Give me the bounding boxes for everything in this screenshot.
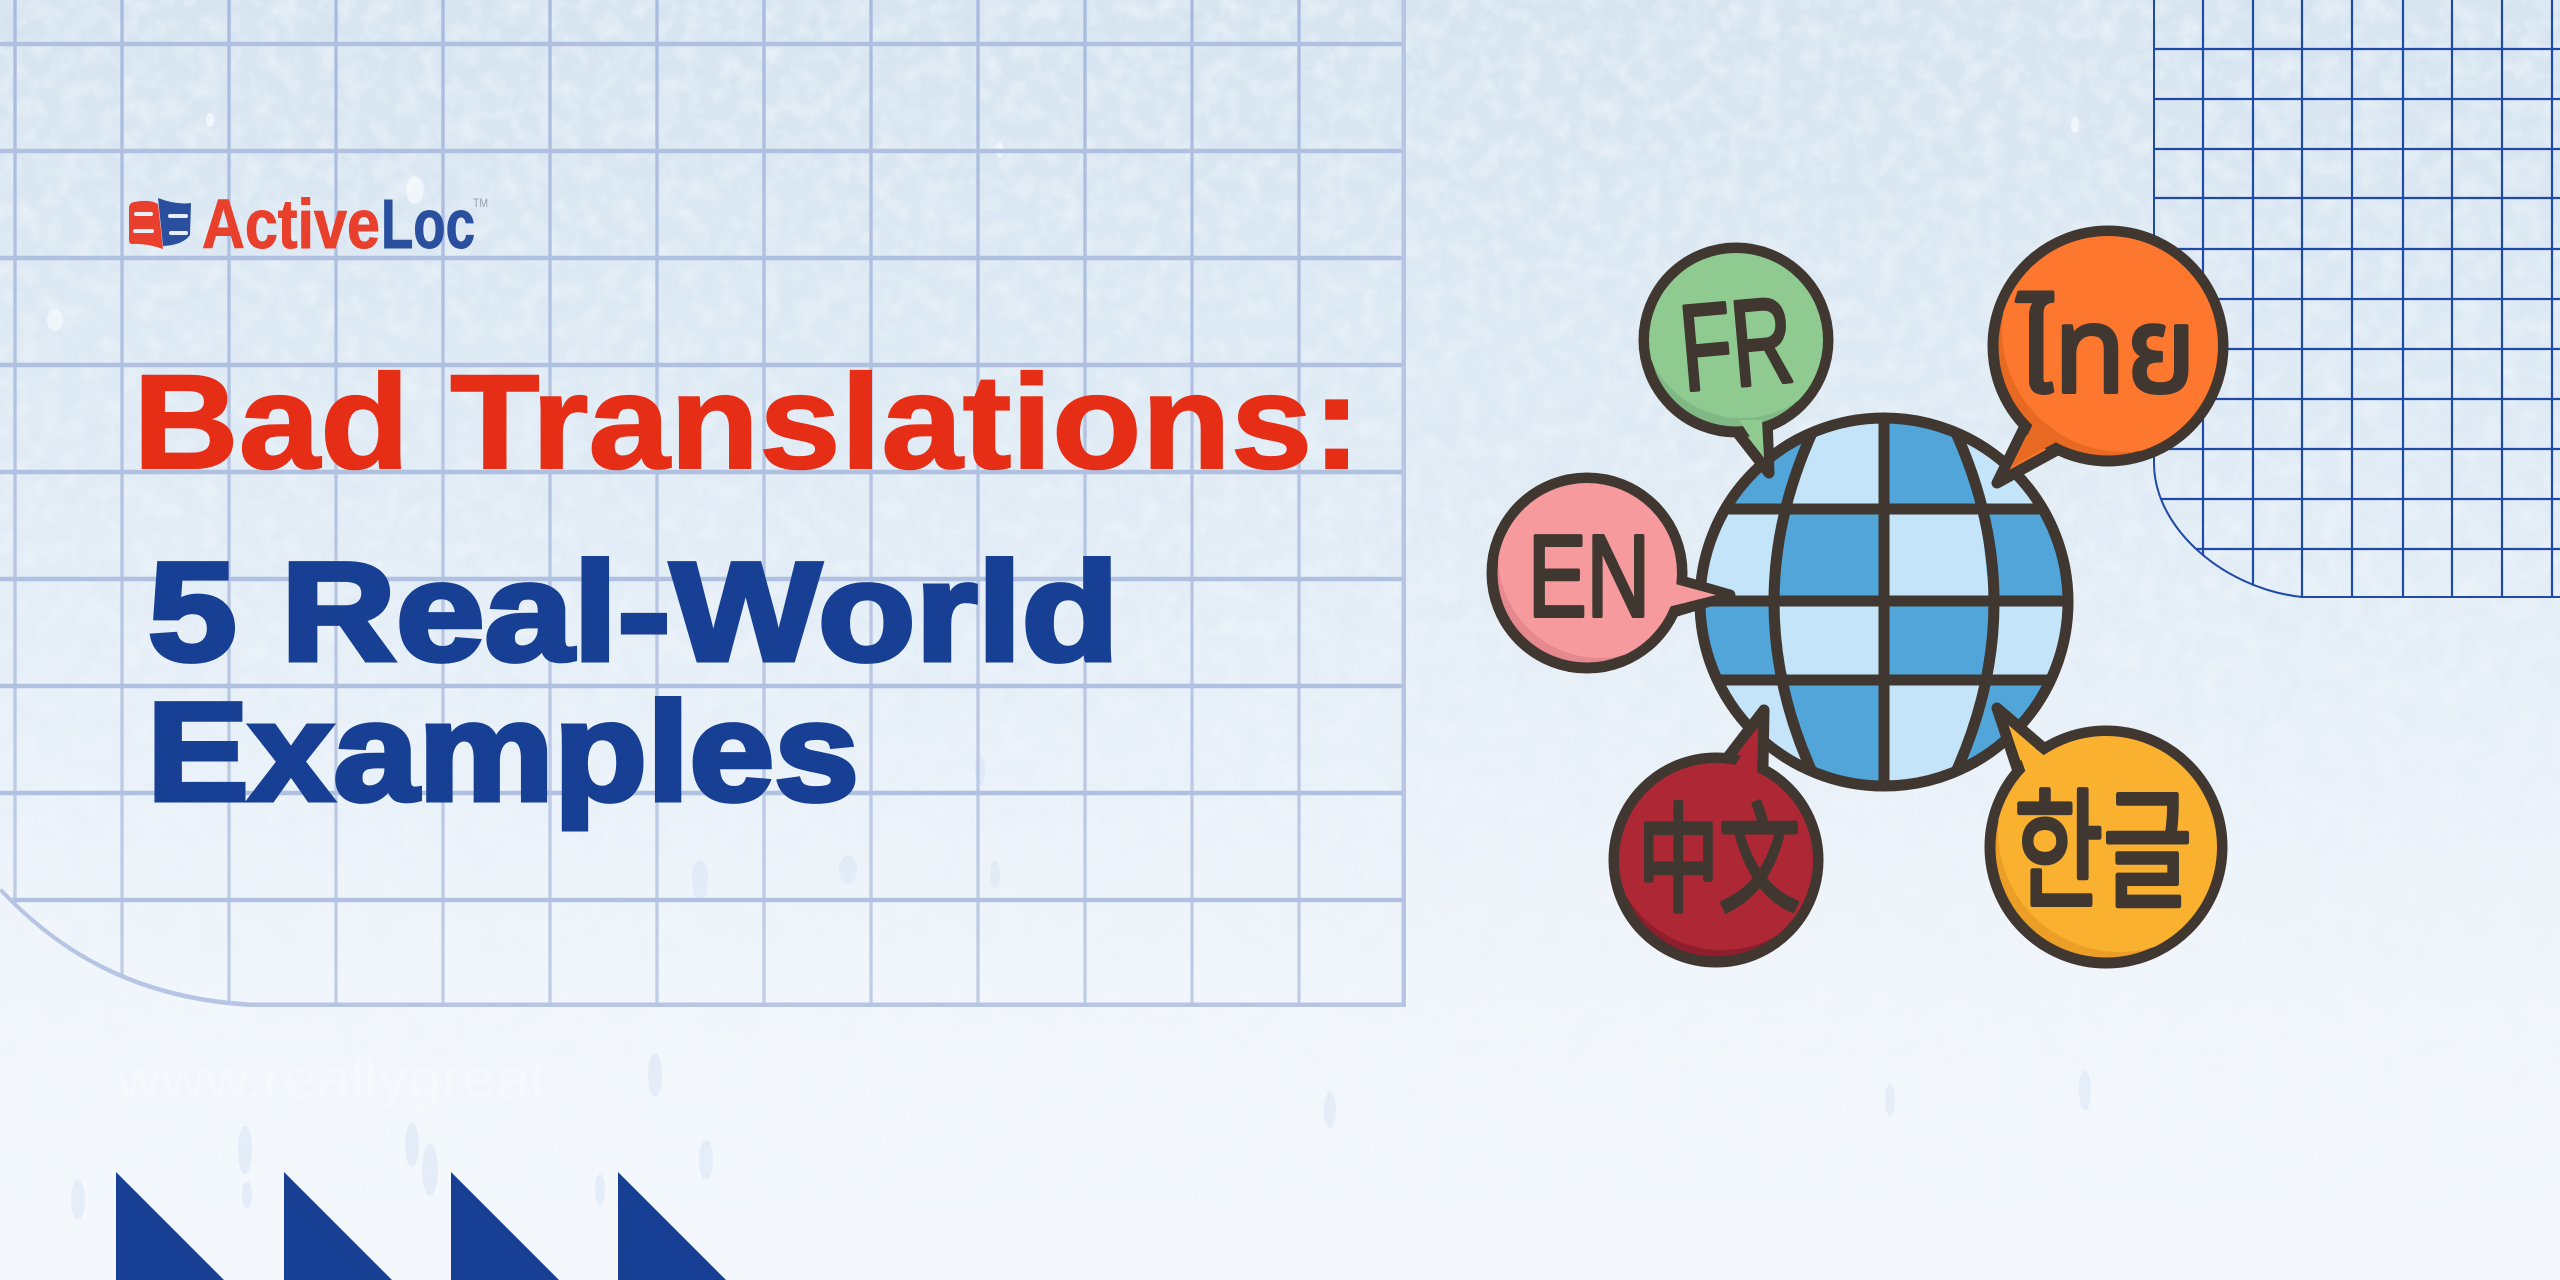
bubble: FR (1642, 218, 1842, 473)
bubble: FR: FR (1675, 271, 1798, 417)
left graph paper grid (0, 0, 1406, 1007)
bubble: EN: EN (1528, 511, 1650, 641)
bubble: Thai: ไทย (2016, 265, 2196, 446)
bubble: Chinese: 中文 (1638, 796, 1800, 928)
bubble: Thai (1993, 208, 2246, 483)
decorative triangles (116, 1172, 726, 1280)
subtitle: 5 Real-World Examples: 5 Real-World (148, 533, 1119, 690)
title: Bad Translations: Bad Translations: (133, 348, 1361, 497)
logo wordmark: Active (202, 185, 380, 263)
logo: ActiveLoc: Loc (381, 185, 475, 263)
right graph paper grid (2150, 0, 2560, 600)
bubble: Korean: 한글 (2014, 779, 2192, 925)
logo: ActiveLoc: TM (473, 196, 488, 210)
bubble: EN (1492, 454, 1730, 668)
bubble: Chinese (1610, 710, 1834, 962)
logo: ActiveLoc (129, 185, 488, 263)
subtitle: 5 Real-World Examples: Examples (147, 673, 859, 830)
bubble: Korean (1990, 708, 2242, 963)
icon: open book (129, 198, 191, 249)
icon: globe with speech bubbles (1492, 208, 2246, 963)
globe (1694, 412, 2074, 792)
subtitle: 5 Real-World Examples (147, 533, 1119, 830)
faint watermark text: www.reallygreat (116, 1047, 547, 1110)
